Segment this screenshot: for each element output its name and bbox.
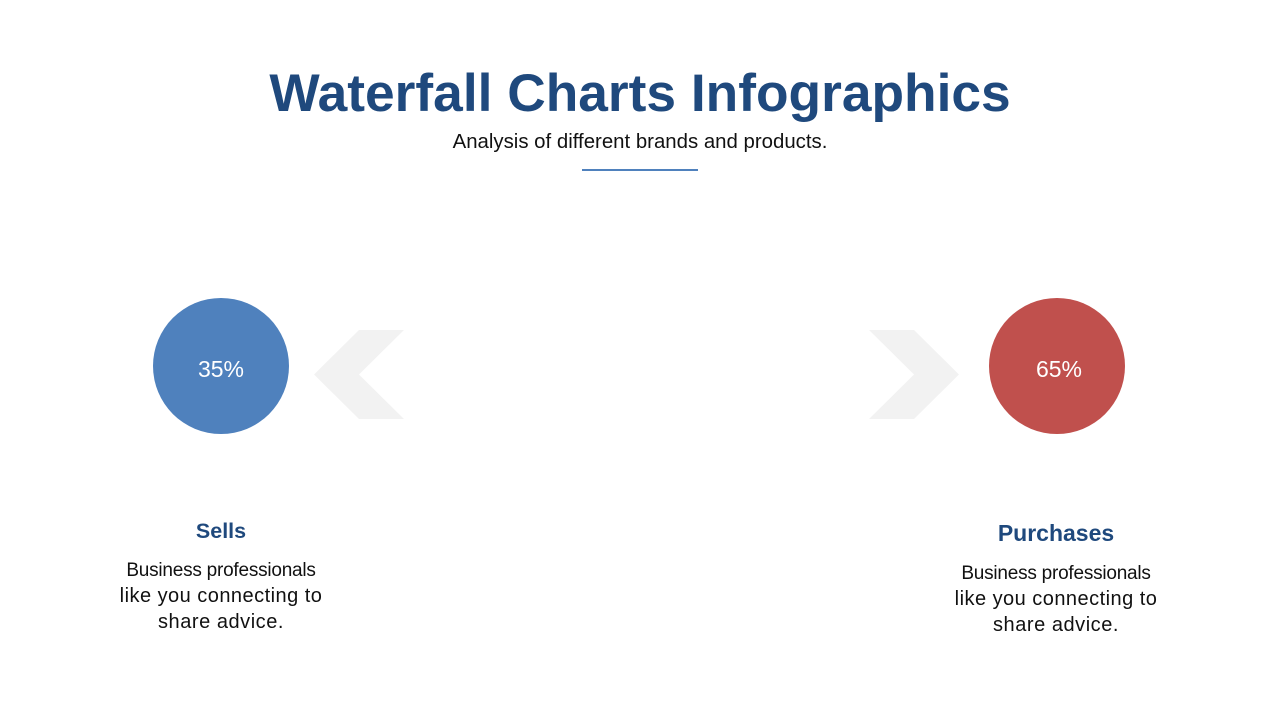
circle: 35%: 35% (198, 356, 244, 382)
circle: 65%: 65% (1036, 356, 1082, 382)
text: sells description: share advice. (158, 611, 284, 633)
text: purchases description: like you connecting to (955, 588, 1157, 610)
arrow: right chevron (870, 330, 958, 419)
text: sells description: like you connecting to (120, 585, 322, 607)
text: purchases description (955, 563, 1157, 636)
text: purchases description: Business professionals (961, 563, 1151, 584)
divider (582, 169, 698, 171)
circle: 35% (153, 298, 289, 434)
circle: 65% (989, 298, 1125, 434)
panel: sells (120, 519, 322, 633)
panel: purchases (955, 520, 1157, 636)
text: purchases description: share advice. (993, 614, 1119, 636)
text: sells description (120, 560, 322, 633)
arrow: left chevron (314, 330, 404, 419)
heading: purchases: Purchases (998, 520, 1114, 546)
title: Waterfall Charts Infographics (269, 64, 1011, 123)
subtitle: Analysis of different brands and products. (453, 131, 827, 153)
heading: sells: Sells (196, 519, 246, 543)
text: sells description: Business professionals (126, 560, 316, 581)
